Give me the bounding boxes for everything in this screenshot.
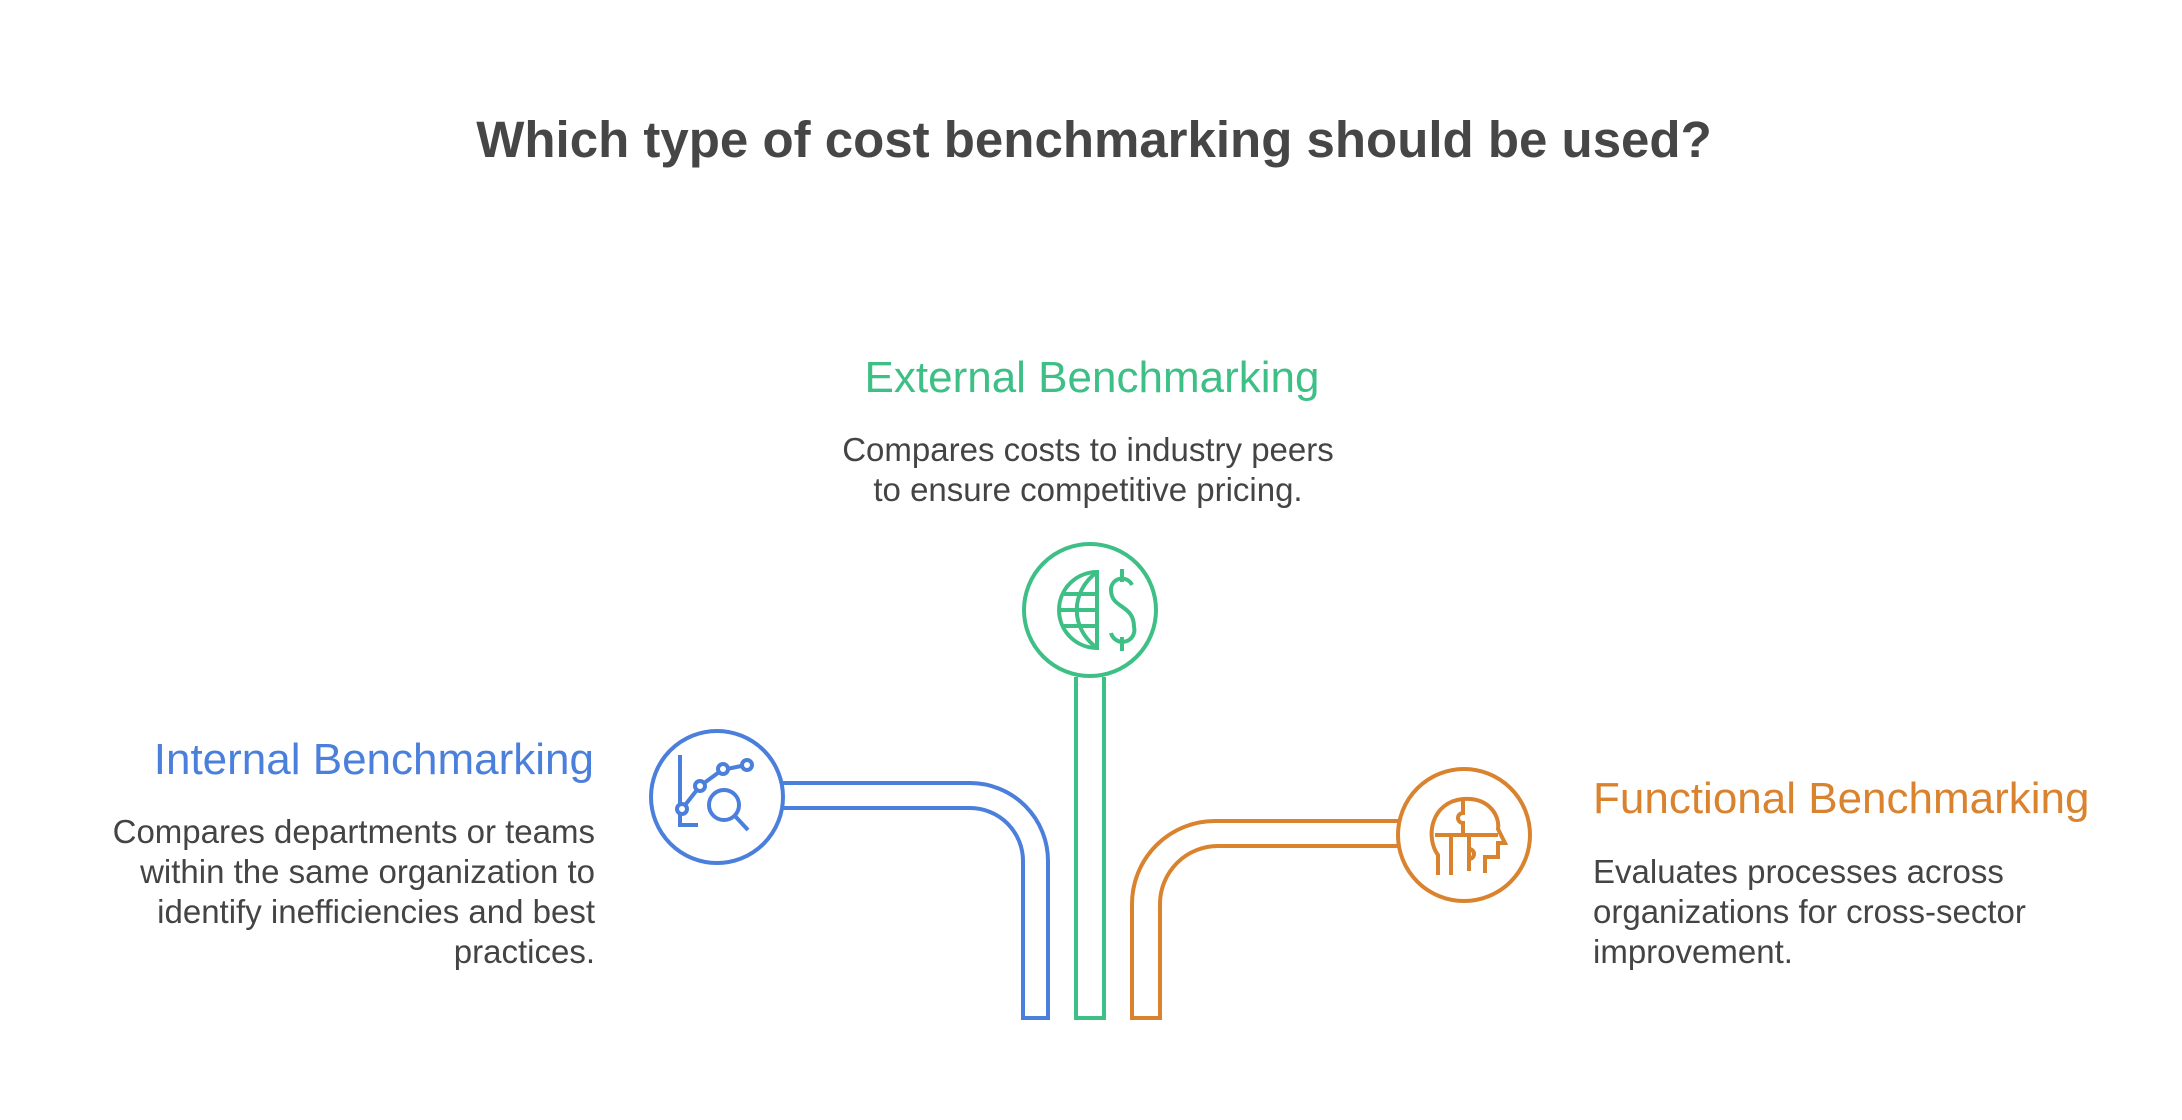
- text: internal description: within the same organization to: [139, 853, 595, 890]
- panel: functional benchmarking: [1593, 774, 2089, 970]
- panel: external benchmarking: [842, 353, 1334, 508]
- text: internal description: Compares departments or teams: [113, 813, 595, 850]
- pipe: orange: [1132, 821, 1398, 1018]
- pipe: blue: [781, 783, 1048, 1018]
- text: functional description: organizations for cross-sector: [1593, 893, 2026, 930]
- text: functional description: improvement.: [1593, 933, 1793, 970]
- text: internal description: identify inefficiencies and best: [157, 893, 595, 930]
- icon: puzzle head: [1398, 769, 1530, 901]
- heading: external: External Benchmarking: [865, 353, 1319, 402]
- heading: functional: Functional Benchmarking: [1593, 774, 2089, 823]
- text: external description: Compares costs to industry peers: [842, 431, 1334, 468]
- panel: internal benchmarking: [113, 735, 595, 970]
- text: internal description: practices.: [454, 933, 595, 970]
- icon: globe dollar: [1024, 544, 1156, 676]
- icon: chart search: [651, 731, 783, 863]
- heading: internal: Internal Benchmarking: [154, 735, 594, 784]
- diagram: pipes and icons: [651, 544, 1530, 1018]
- title: Which type of cost benchmarking should be used?: [476, 111, 1712, 168]
- text: external description: to ensure competitive pricing.: [873, 471, 1303, 508]
- text: functional description: Evaluates processes across: [1593, 853, 2004, 890]
- pipe: green: [1076, 677, 1104, 1018]
